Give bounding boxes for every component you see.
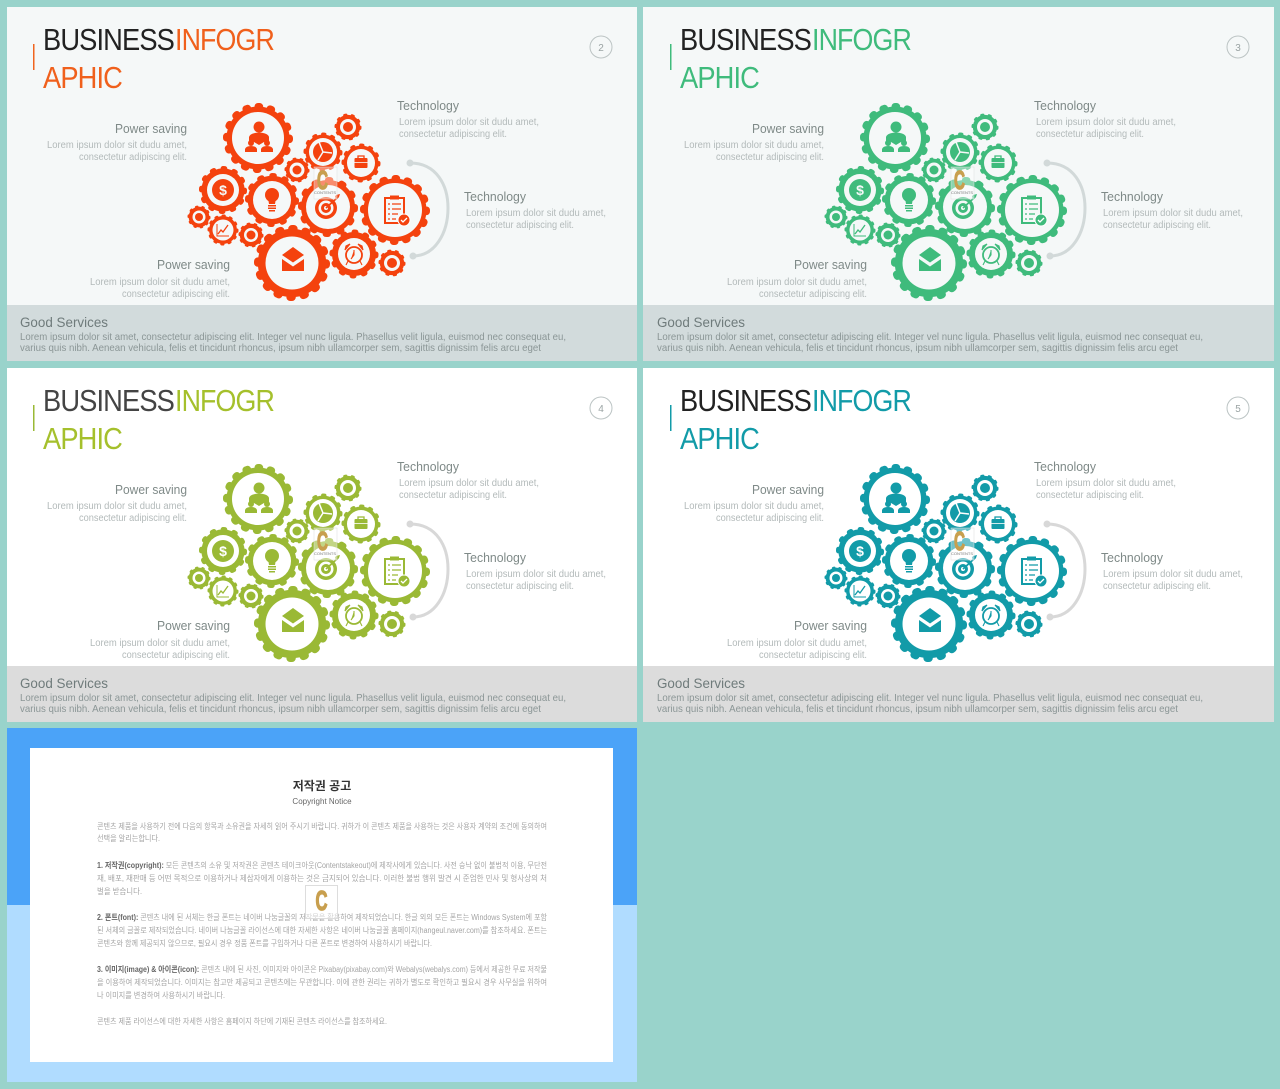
page number badge (1227, 36, 1249, 58)
text block: technology top (1034, 99, 1176, 140)
panel: teal gears (643, 368, 1274, 722)
gear: dollar (838, 529, 882, 573)
section: font: 된 서체의 글꼴로 제작되었습니다. 네이버 나눔글꼴 라이선스에 대한 자세한 사항은 네이버 나눔글꼴 홈페이지(hangeul.naver.com)를 참조하세요. 폰트는 (97, 925, 547, 935)
copyright heading: Copyright Notice (292, 797, 352, 806)
text block: power saving top: Power saving (115, 483, 187, 497)
gear: briefcase (980, 506, 1016, 542)
text block: power saving bottom: consectetur adipiscing elit. (759, 650, 867, 661)
gear: small top (336, 476, 360, 500)
section: copyright: 재, 배포, 재판매 등 어떤 목적으로 이용하거나 제삼자에게 이용하는 것은 금지되어 있습니다. 이러한 불법 행위 발견 시 준엄한 민사 및 형사상의 처 (97, 873, 547, 883)
section: image and icon: 나 이미지를 변경하여 사용하시기 바랍니다. (97, 990, 225, 1000)
gear: small top (336, 115, 360, 139)
text block: technology top: Lorem ipsum dolor sit dudu amet, (1036, 478, 1176, 489)
watermark: C (317, 165, 328, 195)
gear: light bulb (248, 537, 296, 585)
text block: power saving bottom (727, 258, 867, 300)
text block: power saving bottom: Power saving (794, 619, 867, 633)
footer text (20, 315, 566, 354)
text block: power saving bottom: consectetur adipiscing elit. (122, 650, 230, 661)
watermark: C (317, 526, 328, 556)
gear: small top (973, 476, 997, 500)
intro paragraph (97, 821, 547, 843)
gear: briefcase (343, 506, 379, 542)
gear: dollar (201, 168, 245, 212)
gear: dollar: $ (219, 543, 227, 559)
watermark: C (954, 165, 965, 195)
gear: small right (1017, 251, 1041, 275)
gear: small lower (877, 224, 899, 246)
footer text (657, 676, 1203, 715)
title: BUSINESS (680, 383, 811, 418)
watermark: C (954, 526, 965, 556)
page number badge (1227, 397, 1249, 419)
footer text: Good Services (657, 676, 745, 691)
text block: power saving top (684, 122, 824, 163)
text block: power saving bottom (90, 258, 230, 300)
page number badge: 5 (1235, 404, 1241, 415)
text block: technology top: Technology (397, 99, 460, 113)
text block: technology right: Technology (1101, 551, 1164, 565)
text block: technology top: consectetur adipiscing elit. (399, 129, 507, 140)
gear: small right (380, 612, 404, 636)
gear: clipboard (1000, 178, 1064, 242)
section: font: 콘텐츠와 함께 제공되지 않으므로, 필요시 경우 정품 폰트를 구입하거나 다른 폰트로 변경하여 사용하시기 바랍니다. (97, 938, 432, 948)
footer text: Good Services (20, 676, 108, 691)
text block: technology right: Technology (464, 190, 527, 204)
panel: olive gears (7, 368, 637, 722)
copyright heading (292, 778, 352, 806)
gear: mail (895, 590, 963, 658)
title: APHIC (680, 60, 760, 95)
watermark: C (316, 885, 328, 916)
text block: technology right: Lorem ipsum dolor sit dudu amet, (466, 569, 606, 580)
accent bar (33, 405, 34, 431)
intro paragraph: 콘텐츠 제품을 사용하기 전에 다음의 항목과 소유권을 자세히 읽어 주시기 바랍니다. 귀하가 이 콘텐츠 제품을 사용하는 것은 사용자 계약의 조건에 동의하여 (97, 821, 547, 831)
gear: alarm clock (332, 593, 376, 637)
text block: power saving top: consectetur adipiscing elit. (79, 513, 187, 524)
gear: alarm clock (332, 232, 376, 276)
text block: technology top: Technology (1034, 460, 1097, 474)
gear: mail (258, 590, 326, 658)
footer text: Lorem ipsum dolor sit amet, consectetur adipiscing elit. Integer vel nunc ligula. Phasellus velit ligula, euismod nec consequat eu, (657, 692, 1203, 704)
title: INFOGR (175, 22, 274, 57)
footer text: Good Services (20, 315, 108, 330)
closing line: 콘텐츠 제품 라이선스에 대한 자세한 사항은 홈페이지 하단에 기재된 콘텐츠 라이선스를 참조하세요. (97, 1016, 387, 1026)
text block: power saving top: Lorem ipsum dolor sit dudu amet, (47, 501, 187, 512)
gear cluster (826, 468, 1064, 658)
text block: power saving top (47, 122, 187, 163)
title: BUSINESS (43, 22, 174, 57)
text block: power saving bottom: Lorem ipsum dolor sit dudu amet, (90, 277, 230, 288)
text block: power saving bottom: Power saving (157, 619, 230, 633)
title: BUSINESS (43, 383, 174, 418)
gear: dollar (201, 529, 245, 573)
text block: power saving bottom: Lorem ipsum dolor sit dudu amet, (727, 638, 867, 649)
gear: small right (1017, 612, 1041, 636)
text block: technology top: consectetur adipiscing elit. (399, 490, 507, 501)
title: INFOGR (175, 383, 274, 418)
footer text: varius quis nibh. Aenean vehicula, felis et tincidunt rhoncus, ipsum nibh ullamcorper sem, sagittis dignissim felis arcu eget (20, 703, 541, 715)
text block: technology right: Lorem ipsum dolor sit dudu amet, (1103, 208, 1243, 219)
text block: power saving bottom: Power saving (157, 258, 230, 272)
gear cluster (189, 106, 426, 297)
footer text: varius quis nibh. Aenean vehicula, felis et tincidunt rhoncus, ipsum nibh ullamcorper sem, sagittis dignissim felis arcu eget (20, 342, 541, 354)
gear: people (226, 106, 290, 170)
watermark: CONTENTS (314, 190, 336, 195)
panel: green gears (643, 7, 1274, 361)
gear: pie chart (942, 495, 978, 531)
gear: people (864, 468, 926, 530)
arc arrow (406, 160, 448, 260)
gear: small lower (877, 585, 899, 607)
footer text: varius quis nibh. Aenean vehicula, felis et tincidunt rhoncus, ipsum nibh ullamcorper sem, sagittis dignissim felis arcu eget (657, 703, 1178, 715)
gear: alarm clock (969, 593, 1013, 637)
gear: clipboard (1000, 540, 1064, 602)
gear: target (938, 541, 992, 595)
text block: power saving bottom (727, 619, 867, 661)
title: INFOGR (812, 383, 911, 418)
text block: power saving bottom: consectetur adipiscing elit. (759, 289, 867, 300)
title: APHIC (43, 60, 123, 95)
footer band (643, 666, 1274, 722)
text block: technology right (464, 551, 606, 592)
gear: dollar: $ (856, 543, 864, 559)
text block: technology right: consectetur adipiscing elit. (1103, 220, 1211, 231)
gear: small left (189, 207, 209, 227)
text block: technology top: Lorem ipsum dolor sit dudu amet, (399, 117, 539, 128)
text block: power saving bottom: Lorem ipsum dolor sit dudu amet, (727, 277, 867, 288)
title (43, 383, 274, 456)
text block: technology right: Technology (1101, 190, 1164, 204)
section: image and icon: 3. 이미지(image) & 아이콘(icon): 콘텐츠 내에 된 사진, 이미지와 아이콘은 Pixabay(pixabay.com)와 Webalys(webalys.com) 등에서 제공한 무료 저작물 (97, 964, 547, 974)
text block: power saving bottom: consectetur adipiscing elit. (122, 289, 230, 300)
section: copyright: 1. 저작권(copyright): 모든 콘텐츠의 소유 및 저작권은 콘텐츠 테이크아웃(Contentstakeout)에 제작사에게 있습니다. 사전 승낙 없이 불법적 이용, 무단전 (97, 860, 547, 870)
text block: technology top: Lorem ipsum dolor sit dudu amet, (399, 478, 539, 489)
gear: small centre (923, 159, 945, 181)
title (43, 22, 274, 95)
arc arrow (1044, 520, 1085, 620)
gear: small lower (240, 585, 262, 607)
gear cluster (826, 106, 1064, 297)
gear: target (938, 180, 992, 234)
title: APHIC (43, 421, 123, 456)
gear: small left (826, 568, 846, 588)
gear: light bulb (248, 176, 296, 224)
gear: dollar: $ (219, 182, 227, 198)
page number badge: 4 (598, 404, 604, 415)
gear: clipboard (364, 540, 426, 602)
section: font: 2. 폰트(font): 콘텐츠 내에 된 서체는 한글 폰트는 네이버 나눔글꼴의 저작물을 활용하여 제작되었습니다. 한글 외의 모든 폰트는 Windows System에 포함 (97, 912, 548, 922)
watermark: CONTENTS (951, 551, 973, 556)
text block: technology top (1034, 460, 1176, 501)
footer text: Good Services (657, 315, 745, 330)
text block: technology top (397, 460, 539, 501)
title (680, 383, 911, 456)
gear: pie chart (305, 495, 341, 531)
text block: technology top: Lorem ipsum dolor sit dudu amet, (1036, 117, 1176, 128)
gear: people (226, 468, 290, 530)
gear: target (301, 541, 355, 595)
footer band (7, 666, 637, 722)
gear: dollar (838, 168, 882, 212)
gear: people (864, 106, 926, 170)
text block: power saving top: consectetur adipiscing elit. (716, 152, 824, 163)
gear: mail (258, 229, 326, 297)
gear: line chart (209, 577, 237, 605)
watermark: CONTENTS (314, 551, 336, 556)
text block: power saving top: consectetur adipiscing elit. (716, 513, 824, 524)
gear: small centre (923, 520, 945, 542)
gear: small top (973, 115, 997, 139)
text block: technology right (1101, 551, 1243, 592)
gear: small lower (240, 224, 262, 246)
gear: small centre (286, 159, 308, 181)
text block: technology right: consectetur adipiscing elit. (1103, 581, 1211, 592)
gear: small centre (286, 520, 308, 542)
accent bar (33, 44, 34, 70)
gear: target (301, 180, 355, 234)
title (680, 22, 911, 95)
text block: power saving top (684, 483, 824, 524)
gear: light bulb (885, 176, 933, 224)
text block: technology right (464, 190, 606, 231)
text block: technology right: Lorem ipsum dolor sit dudu amet, (466, 208, 606, 219)
gear: clipboard (364, 178, 426, 242)
section: copyright (97, 860, 547, 896)
page number badge (590, 397, 612, 419)
text block: power saving top: consectetur adipiscing elit. (79, 152, 187, 163)
footer text: varius quis nibh. Aenean vehicula, felis et tincidunt rhoncus, ipsum nibh ullamcorper sem, sagittis dignissim felis arcu eget (657, 342, 1178, 354)
text block: power saving bottom (90, 619, 230, 661)
section: copyright: 벌을 받습니다. (97, 886, 142, 896)
title: BUSINESS (680, 22, 811, 57)
gear: pie chart (305, 134, 341, 170)
panel: orange gears (7, 7, 637, 361)
text block: technology right (1101, 190, 1243, 231)
section: image and icon: 을 이용하여 제작되었습니다. 이미지는 참고만 제공되고 콘텐츠에는 무관합니다. 이에 관한 권리는 귀하가 별도로 확인하고 필요시 경우 사무실을 위하여 (97, 977, 547, 987)
panel: copyright notice (7, 728, 637, 1082)
accent bar (670, 44, 672, 70)
section: image and icon (97, 964, 547, 1000)
text block: power saving bottom: Power saving (794, 258, 867, 272)
text block: technology top: consectetur adipiscing elit. (1036, 129, 1144, 140)
gear: line chart (846, 577, 874, 605)
arc arrow (1044, 160, 1085, 260)
text block: power saving bottom: Lorem ipsum dolor sit dudu amet, (90, 638, 230, 649)
title: APHIC (680, 421, 760, 456)
page number badge (590, 36, 612, 58)
text block: power saving top: Power saving (752, 122, 824, 136)
text block: power saving top: Lorem ipsum dolor sit dudu amet, (47, 140, 187, 151)
intro paragraph: 선택을 알리는합니다. (97, 833, 160, 843)
gear: mail (895, 229, 963, 297)
accent bar (670, 405, 672, 431)
text block: power saving top (47, 483, 187, 524)
text block: power saving top: Lorem ipsum dolor sit dudu amet, (684, 140, 824, 151)
copyright heading: 저작권 공고 (293, 778, 351, 793)
gear: line chart (846, 216, 874, 244)
section: font (97, 912, 548, 948)
watermark: CONTENTS (951, 190, 973, 195)
footer text: Lorem ipsum dolor sit amet, consectetur adipiscing elit. Integer vel nunc ligula. Phasellus velit ligula, euismod nec consequat eu, (657, 331, 1203, 343)
text block: technology top: Technology (397, 460, 460, 474)
white sheet (30, 748, 613, 1062)
footer text (657, 315, 1203, 354)
text block: power saving top: Lorem ipsum dolor sit dudu amet, (684, 501, 824, 512)
text block: technology right: Technology (464, 551, 527, 565)
gear: small left (826, 207, 846, 227)
text block: technology top: consectetur adipiscing elit. (1036, 490, 1144, 501)
text block: technology right: consectetur adipiscing elit. (466, 581, 574, 592)
footer text: Lorem ipsum dolor sit amet, consectetur adipiscing elit. Integer vel nunc ligula. Phasellus velit ligula, euismod nec consequat eu, (20, 331, 566, 343)
text block: power saving top: Power saving (115, 122, 187, 136)
text block: technology right: consectetur adipiscing elit. (466, 220, 574, 231)
gear: dollar: $ (856, 182, 864, 198)
gear: alarm clock (969, 232, 1013, 276)
page number badge: 3 (1235, 43, 1241, 54)
footer text: Lorem ipsum dolor sit amet, consectetur adipiscing elit. Integer vel nunc ligula. Phasellus velit ligula, euismod nec consequat eu, (20, 692, 566, 704)
gear: small right (380, 251, 404, 275)
text block: power saving top: Power saving (752, 483, 824, 497)
gear: briefcase (980, 145, 1016, 181)
text block: technology top (397, 99, 539, 140)
footer band (643, 305, 1274, 361)
text block: technology right: Lorem ipsum dolor sit dudu amet, (1103, 569, 1243, 580)
gear: light bulb (885, 537, 933, 585)
gear: pie chart (942, 134, 978, 170)
page number badge: 2 (598, 43, 604, 54)
gear: briefcase (343, 145, 379, 181)
title: INFOGR (812, 22, 911, 57)
footer text (20, 676, 566, 715)
text block: technology top: Technology (1034, 99, 1097, 113)
footer band (7, 305, 637, 361)
arc arrow (406, 520, 448, 620)
watermark (306, 885, 338, 918)
gear: small left (189, 568, 209, 588)
gear: line chart (209, 216, 237, 244)
gear cluster (189, 468, 426, 658)
